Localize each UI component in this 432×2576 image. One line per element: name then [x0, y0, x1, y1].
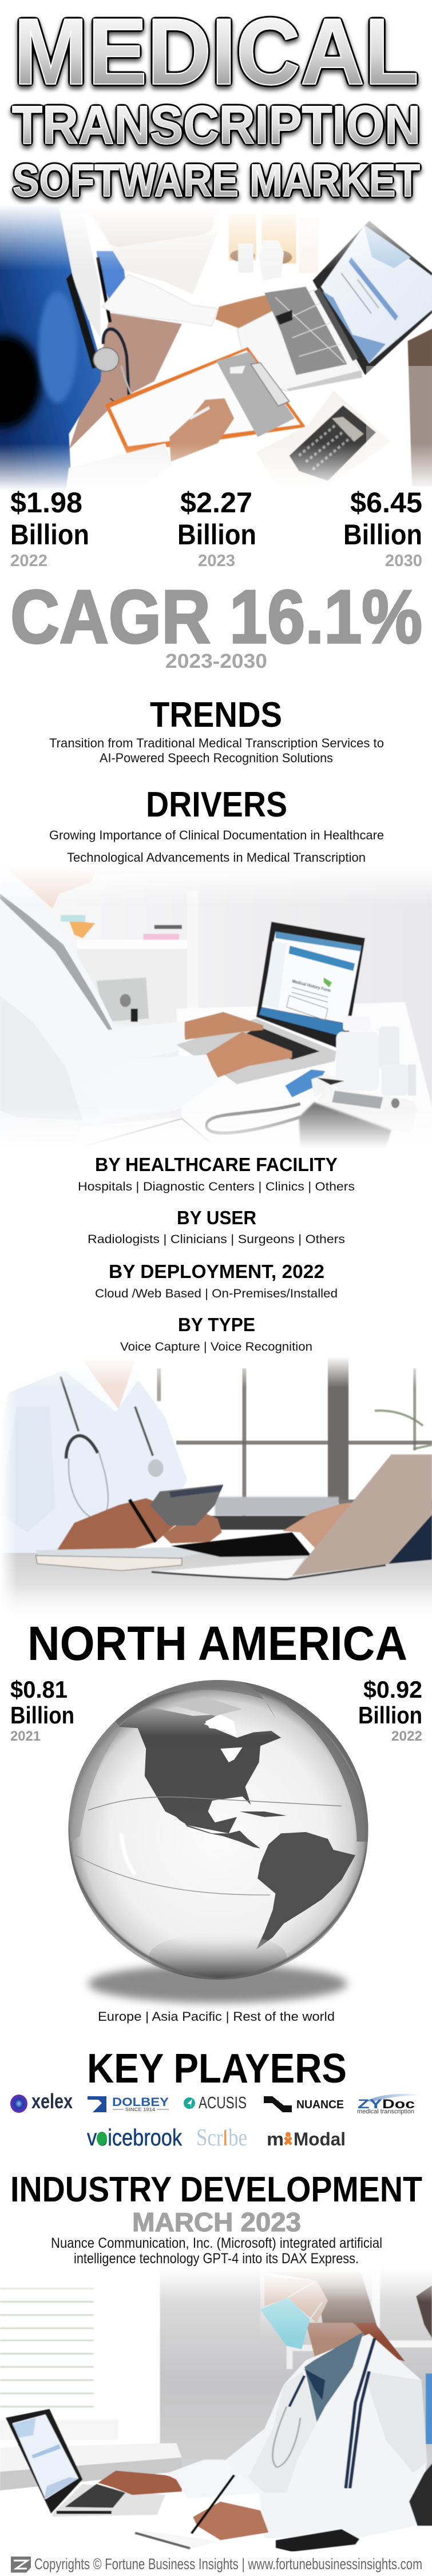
globe illustration: [69, 1679, 369, 2003]
writing hand: [169, 398, 234, 462]
logo: ZyDoc: [357, 2094, 423, 2115]
logo: Dolbey: SINCE 1914: [125, 2107, 156, 2112]
stat: North America 2021: $0.81: [10, 1676, 68, 1703]
development description: [51, 2235, 382, 2267]
segment: by type: [120, 1314, 312, 1353]
heading: key players: KEY PLAYERS: [87, 2046, 347, 2092]
stat: 2030 market size: $6.45: [350, 487, 422, 519]
glass base: [149, 1933, 287, 1980]
glass equator lines: [88, 1797, 342, 1810]
logo: mModal: m: [267, 2129, 284, 2149]
logo: Nuance: [264, 2096, 344, 2112]
footer logo: [11, 2557, 31, 2573]
logo: Acusis: ACUSIS: [199, 2094, 247, 2112]
stat: North America 2021: Billion: [10, 1702, 74, 1729]
stat: North America 2022: [358, 1676, 422, 1744]
stat: 2023 market size: [177, 487, 256, 570]
drivers: [49, 785, 384, 865]
stat: 2022 market size: Billion: [10, 519, 89, 551]
segment: by type: BY TYPE: [178, 1314, 255, 1335]
drivers: Growing Importance of Clinical Documentation in Healthcare: [49, 828, 384, 842]
logo: xelex: [10, 2089, 73, 2113]
logo: mModal: [267, 2129, 346, 2149]
near laptop: [283, 1502, 355, 1548]
head: [264, 2272, 378, 2338]
development date: MARCH 2023: [132, 2207, 301, 2237]
logo: mModal: Modal: [294, 2129, 346, 2149]
stat: 2022 market size: [10, 487, 89, 570]
mask: [260, 2298, 310, 2349]
stat: 2023 market size: Billion: [177, 519, 256, 551]
fades: [0, 205, 432, 270]
bottles: [336, 1032, 379, 1091]
segment: by deployment: [95, 1261, 338, 1300]
coat: [0, 1371, 187, 1553]
papers: [36, 1547, 209, 1558]
stat: 2023 market size: $2.27: [180, 487, 252, 519]
arm and hands: [57, 1498, 179, 1552]
stat: 2022 market size: 2022: [10, 552, 47, 570]
bottles: [229, 214, 256, 260]
laptop: [6, 2409, 82, 2514]
stat: 2030 market size: [343, 487, 422, 570]
stat: 2030 market size: 2030: [385, 552, 422, 570]
other regions: Europe | Asia Pacific | Rest of the world: [98, 2009, 335, 2024]
logo: Scribe: Scribe: [196, 2125, 247, 2151]
table: [69, 1002, 432, 1153]
development description: Nuance Communication, Inc. (Microsoft) integrated artificial: [51, 2235, 382, 2251]
shelves: [372, 2268, 380, 2343]
drivers: DRIVERS: [146, 785, 287, 825]
segment: by healthcare facility: Hospitals | Diagnostic Centers | Clinics | Others: [78, 1180, 355, 1193]
segment: by healthcare facility: [78, 1154, 355, 1193]
table: [0, 1553, 432, 1621]
photo: masked doctor at laptop: [0, 2267, 432, 2554]
fades: [0, 2267, 432, 2302]
sill: [0, 2443, 182, 2472]
person: [4, 866, 98, 909]
logo: Nuance: NUANCE: [296, 2099, 344, 2111]
laptop: [256, 922, 365, 1052]
segment: by type: Voice Capture | Voice Recognition: [120, 1340, 312, 1353]
stat: North America 2022: 2022: [391, 1729, 422, 1744]
logo: ZyDoc: medical transcription: [357, 2108, 414, 2115]
notepad and calculator: [256, 391, 391, 489]
stat: 2022 market size: $1.98: [10, 487, 82, 519]
segment: by healthcare facility: BY HEALTHCARE FACILITY: [95, 1154, 338, 1175]
logo: voicebrook: voicebrook: [87, 2124, 182, 2151]
stat: 2023 market size: 2023: [198, 552, 235, 570]
inhaler: [285, 1069, 325, 1097]
trends: Transition from Traditional Medical Transcription Services to: [49, 736, 384, 750]
heading: north america: NORTH AMERICA: [27, 1617, 407, 1670]
blinds: [0, 2288, 94, 2407]
fades: [0, 1356, 432, 1388]
CAGR figure: 2023-2030: [165, 650, 267, 672]
hand on keyboard: [216, 294, 292, 329]
shirt: [304, 2332, 364, 2422]
trends: [49, 695, 384, 765]
segment: by user: [88, 1207, 345, 1246]
fades: [0, 865, 432, 905]
notebook: [135, 2531, 217, 2549]
blood pressure monitor: [317, 1088, 417, 1133]
clipboard: [105, 347, 306, 453]
segment: by user: BY USER: [177, 1207, 256, 1228]
laptop base: [237, 290, 362, 391]
window frames: [157, 1355, 432, 1516]
photo: doctor with blue scrubs at laptop: [0, 205, 432, 492]
logo: ZyDoc: Doc: [382, 2097, 415, 2111]
laptop screen: [313, 221, 432, 375]
photo: doctor typing medical form: [0, 858, 432, 1153]
chair: [409, 2459, 432, 2533]
photo: doctor with tablet at table: [0, 1355, 432, 1623]
logo: xelex: xelex: [31, 2089, 73, 2113]
segment: by deployment: Cloud /Web Based | On-Premises/Installed: [95, 1287, 338, 1300]
stat: 2030 market size: Billion: [343, 519, 422, 551]
notebook: [36, 1555, 182, 1571]
tablet: [150, 1484, 223, 1526]
segment: by user: Radiologists | Clinicians | Surgeons | Others: [88, 1233, 345, 1246]
trends: TRENDS: [150, 695, 282, 735]
stat: North America 2022: $0.92: [363, 1676, 422, 1703]
sleeve: [102, 274, 217, 326]
segment: by deployment: BY DEPLOYMENT, 2022: [109, 1261, 324, 1282]
logo: ZyDoc: ZY: [358, 2097, 382, 2111]
wall: [160, 2268, 432, 2495]
photo: doctor typing medical form: Medical History Form: [292, 978, 331, 993]
stethoscope: [61, 1376, 153, 1456]
drivers: Technological Advancements in Medical Transcription: [67, 850, 366, 865]
stethoscope: [346, 2338, 375, 2489]
title: [12, 0, 421, 206]
development description: intelligence technology GPT-4 into its DAX Express.: [74, 2251, 359, 2267]
stat: North America 2021: [10, 1676, 74, 1744]
logo: Dolbey: [88, 2096, 169, 2112]
right edge dark: [408, 329, 432, 487]
logo: Dolbey: DOLBEY: [112, 2096, 169, 2109]
land masses: [276, 1694, 369, 1842]
trends: AI-Powered Speech Recognition Solutions: [100, 751, 333, 765]
logo: Acusis: [184, 2094, 247, 2112]
hands: [98, 2471, 182, 2495]
table: [0, 2472, 432, 2554]
stat: North America 2022: Billion: [358, 1702, 422, 1729]
coat: [168, 2334, 427, 2538]
stat: North America 2021: 2021: [10, 1729, 41, 1744]
hands: [185, 1012, 263, 1040]
phone: [276, 2529, 359, 2552]
